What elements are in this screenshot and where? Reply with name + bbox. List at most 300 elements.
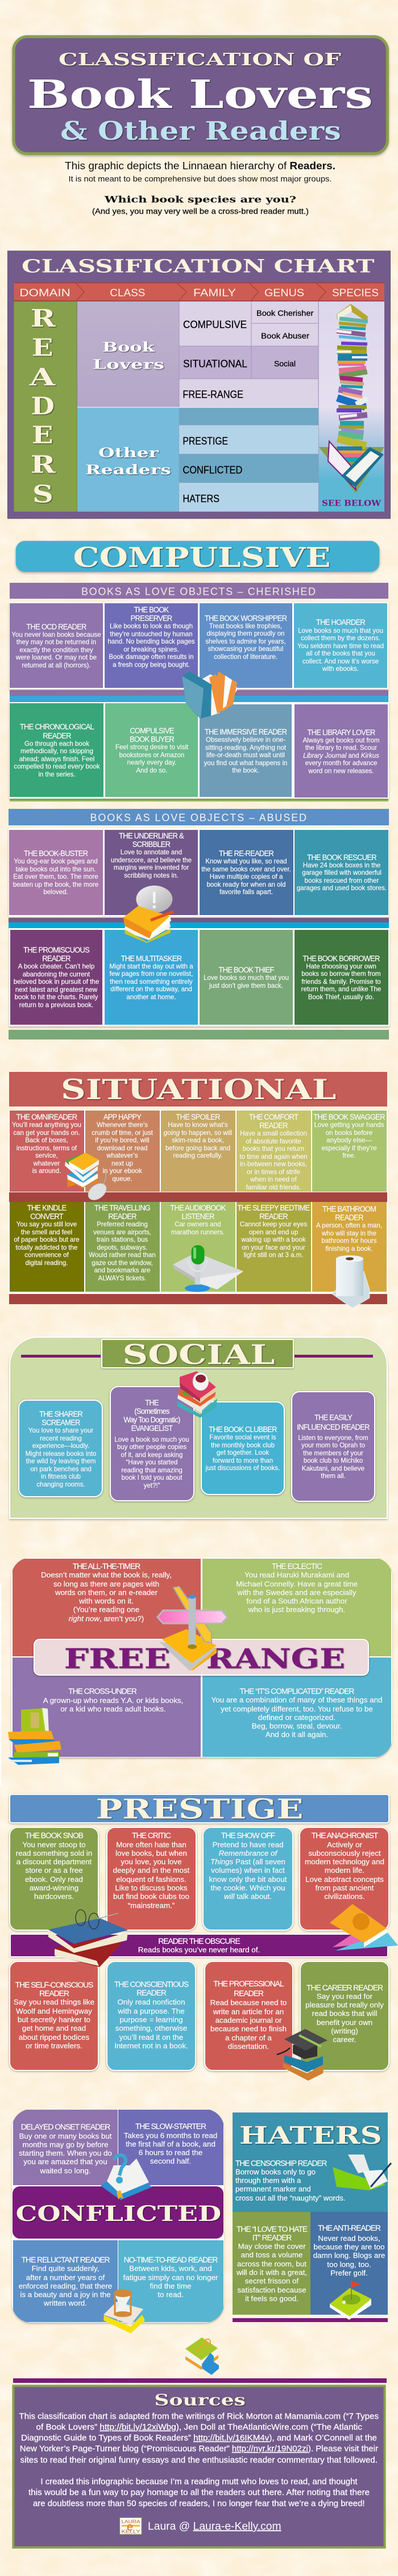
- icon: book stack and mouse: [65, 1153, 110, 1204]
- card: the book snob: award-winning: [30, 1884, 78, 1892]
- domain column: readers: S: [32, 480, 53, 508]
- card: the immersive reader: sitting-reading. Anything not: [205, 744, 286, 751]
- card: the book snob: You never stoop to: [22, 1840, 85, 1849]
- card: the book snob: read something sold in: [15, 1849, 92, 1857]
- card: the career reader: read books that will: [312, 2009, 377, 2018]
- card: the easily influenced reader: the members of your: [303, 1449, 363, 1457]
- card: the anachronist: subconsciously reject: [308, 1849, 380, 1857]
- frame row 2: [9, 702, 389, 799]
- family: haters: HATERS: [183, 492, 219, 504]
- card: the i love to hate it reader: across the room, but: [237, 2260, 306, 2268]
- card: the book-buster: Eat over them, too. The more: [14, 872, 98, 880]
- card: the multitasker: another at home.: [126, 993, 176, 1001]
- domain column: readers: [14, 302, 77, 512]
- quadrant: the it's complicated reader: [202, 1658, 391, 1757]
- card: the book snob: hardcovers.: [34, 1892, 74, 1901]
- card: the OCD reader: THE OCD READER: [27, 623, 86, 631]
- card: the show off: will talk about.: [224, 1892, 272, 1901]
- card: the hoarder: You seldom have time to read: [297, 642, 383, 650]
- card: the OCD reader: they may not be returned in: [16, 638, 97, 646]
- card: the sleepy bedtime reader: light still on at 3 a.m.: [244, 1251, 304, 1259]
- sub-banner abused: [9, 809, 389, 825]
- panel: header title: [14, 36, 388, 153]
- card: the OCD reader: returned at all (horrors).: [22, 661, 91, 669]
- header band with chevrons: GENUS: [264, 287, 304, 299]
- card: the book-buster: [9, 830, 103, 915]
- card: the re-reader: favorite falls apart.: [219, 888, 273, 896]
- card: the immersive reader: the book.: [232, 766, 259, 774]
- card: the comfort reader: or in times of strife: [247, 1168, 300, 1176]
- card: the book borrower: friends & family. Promise to: [302, 978, 381, 986]
- card: the chronological reader: Go through each book: [24, 740, 89, 748]
- card: the travelling reader: ALWAYS tickets.: [98, 1274, 147, 1282]
- panel: conflicted: [12, 2109, 224, 2323]
- card: the comfort reader: [237, 1110, 311, 1192]
- card: the book clubber: THE BOOK CLUBBER: [209, 1425, 277, 1434]
- bottom green band: [9, 799, 388, 801]
- panel: sources: [13, 2386, 385, 2548]
- quadrant: delayed onset reader: DELAYED ONSET READER: [20, 2123, 110, 2131]
- family: haters: [179, 483, 318, 512]
- card: the professional reader: Read because need to: [210, 1998, 287, 2007]
- panel: haters top: Borrow books only to go: [235, 2168, 316, 2176]
- quadrant: the eclectic: THE ECLECTIC: [272, 1562, 322, 1571]
- card: the anachronist: modern technology and: [305, 1857, 384, 1866]
- card: the book rescuer: Have 24 book boxes in the: [302, 861, 380, 869]
- card: the travelling reader: READER: [108, 1212, 136, 1221]
- card: the book clubber: just discussions of books.: [206, 1464, 280, 1472]
- card: the hoarder: collect. And now it’s worse: [302, 657, 379, 665]
- card: the book-buster: THE BOOK-BUSTER: [24, 849, 88, 858]
- card: the book swagger: THE BOOK SWAGGER: [314, 1113, 385, 1121]
- card: the library lover: [295, 704, 388, 798]
- logo: laura e kelly: e: [127, 2521, 133, 2533]
- card: the omnireader: THE OMNIREADER: [16, 1113, 77, 1121]
- card: the travelling reader: gaze out the window,: [92, 1259, 153, 1267]
- icon: glasses on books: [48, 1910, 128, 1967]
- family: conflicted: [179, 454, 318, 483]
- prestige heading: PRESTIGE: [96, 1794, 304, 1826]
- card: the spoiler: before going back and: [165, 1144, 230, 1152]
- card: app happy: next up: [111, 1159, 133, 1167]
- card: the sharer screamer: THE SHARER: [39, 1410, 82, 1418]
- card: the book rescuer: THE BOOK RESCUER: [307, 853, 376, 862]
- author credit: Laura @ Laura-e-Kelly.com: [148, 2520, 281, 2532]
- icon: blue and orange books: [182, 671, 237, 719]
- quadrant: the it's complicated reader: yet completely different, too. You refuse to be: [221, 1705, 372, 1713]
- haters bottom band: [232, 2318, 388, 2322]
- card: the kindle convert: [10, 1202, 84, 1292]
- icon: books with tea cup: [177, 1371, 217, 1418]
- card: the book snob: THE BOOK SNOB: [25, 1831, 83, 1840]
- card: the evangelist: Love a book so much you: [115, 1435, 189, 1443]
- intro text: [65, 160, 335, 216]
- card: the book worshipper: collection of literature.: [214, 653, 277, 661]
- card: the underliner and scribbler: margins were invented for: [114, 863, 189, 871]
- card: app happy: APP HAPPY: [103, 1113, 141, 1121]
- card: the OCD reader: were loaned. Or may not be: [16, 653, 97, 661]
- card: the book borrower: Book Thief, usually do.: [308, 993, 374, 1001]
- colour bands between abused rows: [9, 918, 389, 928]
- card: the i love to hate it reader: THE “I LOVE TO HATE: [236, 2225, 307, 2233]
- card: the hoarder: collect them by the dozens.: [301, 634, 380, 642]
- card: the library lover: THE LIBRARY LOVER: [308, 728, 375, 737]
- card: the self-conscious reader: but secretly hanker to: [18, 2015, 90, 2024]
- card: the sleepy bedtime reader: THE SLEEPY BEDTIME: [238, 1204, 310, 1212]
- card: the omnireader: can get your hands on.: [14, 1129, 80, 1137]
- icon: green book with pen: [333, 2155, 391, 2190]
- quadrant: the eclectic: [202, 1559, 391, 1656]
- card: the conscientious reader: something, otherwise: [115, 2024, 187, 2032]
- social heading: SOCIAL: [123, 1339, 275, 1371]
- card: the multitasker: few pages from one novelist,: [110, 970, 193, 978]
- card: the travelling reader: venues are airports,: [93, 1228, 151, 1236]
- card: the sharer screamer: changing rooms.: [36, 1480, 85, 1488]
- card: the library lover: every month for advance: [305, 759, 377, 767]
- card: the book clubber: get together. Look: [217, 1448, 269, 1456]
- card: the book worshipper: THE BOOK WORSHIPPER: [205, 614, 287, 623]
- card: the book-buster: You dog-ear book pages and: [14, 857, 98, 865]
- conflicted heading: CONFLICTED: [16, 2201, 221, 2226]
- card: the book swagger: especially if they’re: [322, 1144, 377, 1152]
- card: the evangelist: buy other people copies: [117, 1443, 186, 1451]
- card: the book borrower: [295, 930, 388, 1025]
- panel: haters top: [232, 2112, 388, 2212]
- quadrant: the all-the-timer: [13, 1559, 201, 1656]
- card: the book preserver: [105, 603, 198, 688]
- quadrant: the it's complicated reader: defined or categorized.: [258, 1713, 335, 1722]
- sources paragraph 1: Diagnostic Guide to Types of Book Readers” http://bit.ly/16IKM4v), and Mark O’Connell at the: [21, 2433, 377, 2443]
- header band with chevrons: DOMAIN: [19, 287, 71, 299]
- card: the book preserver: or breaking spines.: [124, 645, 179, 653]
- card: the re-reader: book ready for when an old: [207, 880, 286, 888]
- card: the omnireader: is around.: [32, 1167, 61, 1175]
- header band with chevrons: SPECIES: [332, 287, 379, 299]
- card: the underliner and scribbler: scribbling notes in.: [124, 871, 179, 879]
- card: the sleepy bedtime reader: READER: [260, 1212, 288, 1221]
- intro text: (And yes, you may very well be a cross-bred reader mutt.): [92, 207, 309, 216]
- quadrant: the eclectic: Michael Connelly. Have a great time: [236, 1580, 358, 1588]
- card: the anachronist: civilizations.: [324, 1892, 364, 1901]
- class: other readers: Readers: [85, 462, 171, 478]
- card: the sleepy bedtime reader: on your face and your: [242, 1243, 305, 1251]
- card: the travelling reader: depots, subways.: [97, 1243, 148, 1251]
- sources paragraph 1: New Yorker’s Page-Turner blog (“Promiscuous Reader” http://nyr.kr/19N02zi). Please visit their: [20, 2444, 378, 2454]
- quadrant: the all-the-timer: so long as there are pages with: [53, 1580, 159, 1588]
- card: the self-conscious reader: READER: [39, 1989, 69, 1998]
- card: the evangelist: [110, 1386, 194, 1501]
- card: the chronological reader: ahead; always finish. Feel: [19, 755, 94, 763]
- family grid lines: [179, 302, 318, 512]
- card: app happy: whatever’s: [107, 1151, 138, 1159]
- situational frame: [9, 1110, 388, 1294]
- card: the critic: More often hate than: [116, 1840, 186, 1849]
- card: the audiobook listener: marathon runners.: [171, 1228, 225, 1236]
- see below label: SEE BELOW: [322, 499, 381, 508]
- card: the anti-reader: [310, 2212, 388, 2315]
- card: the kindle convert: CONVERT: [31, 1212, 63, 1221]
- family: situational: SITUATIONAL: [183, 358, 247, 370]
- card: the career reader: career.: [333, 2035, 356, 2044]
- quadrant: the all-the-timer: (You’re reading one: [73, 1605, 139, 1614]
- card: the book swagger: free.: [343, 1151, 356, 1159]
- card: the omnireader: [10, 1110, 84, 1192]
- card: the critic: eloquent of fashions.: [116, 1875, 186, 1884]
- card: the omnireader: You’ll read anything you: [12, 1121, 81, 1129]
- card: the anti-reader: THE ANTI-READER: [318, 2224, 380, 2232]
- panel: haters top: THE CENSORSHIP READER: [235, 2159, 326, 2168]
- banner: reader the obscure: Reads books you’ve never heard of.: [138, 1945, 260, 1954]
- family: conflicted: CONFLICTED: [183, 464, 242, 475]
- card: the book preserver: THE BOOK: [134, 606, 169, 614]
- icon: hourglass on books: [103, 2289, 145, 2333]
- quadrant: the slow-starter: Takes you 6 months to read: [124, 2131, 217, 2140]
- family: prestige: [179, 425, 318, 454]
- quadrant: the all-the-timer: Doesn’t matter what the book is, really,: [41, 1571, 172, 1579]
- card: the travelling reader: THE TRAVELLING: [94, 1204, 150, 1212]
- quadrant: the reluctant reader: written word.: [44, 2299, 86, 2307]
- card: the book clubber: Favorite social event is: [209, 1433, 276, 1441]
- card: the self-conscious reader: [9, 1961, 99, 2071]
- quadrant: delayed onset reader: waited so long.: [40, 2166, 90, 2175]
- card: the bathroom reader: A person, often a man,: [316, 1221, 382, 1229]
- card: the book preserver: they’re untouched by human: [110, 630, 193, 638]
- card: the bathroom reader: finishing a book.: [326, 1245, 373, 1252]
- card: the chronological reader: THE CHRONOLOGICAL: [19, 723, 94, 731]
- card: the i love to hate it reader: secret frisson of: [244, 2277, 298, 2285]
- card: app happy: if you’re bored, will: [95, 1136, 150, 1144]
- card: the underliner and scribbler: SCRIBBLER: [132, 840, 170, 849]
- card: the book swagger: [312, 1110, 387, 1192]
- card: the multitasker: then read something entirely: [110, 978, 193, 986]
- card: the book thief: just don’t give them back.: [209, 982, 283, 990]
- free-range heading: [64, 1643, 345, 1675]
- genus: book abuser: Book Abuser: [261, 331, 309, 340]
- domain column: readers: R: [31, 450, 56, 478]
- card: the comfort reader: when in need of: [251, 1175, 297, 1183]
- card: the re-reader: THE RE-READER: [219, 849, 273, 858]
- card: the anti-reader: Never read books,: [318, 2234, 380, 2243]
- card: the book swagger: on books before: [326, 1129, 373, 1137]
- card: the omnireader: service,: [36, 1151, 58, 1159]
- chart title: CLASSIFICATION CHART: [22, 255, 375, 277]
- card: the sleepy bedtime reader: waking up with a book: [242, 1235, 306, 1243]
- card: the anachronist: from past ancient: [315, 1884, 374, 1892]
- domain column: readers: R: [31, 304, 56, 332]
- card: the book clubber: the monthly book club: [211, 1441, 275, 1449]
- quadrant: delayed onset reader: you are amazed that you: [23, 2157, 107, 2166]
- header band with chevrons: [14, 282, 384, 301]
- icon: toilet roll: [332, 1255, 370, 1308]
- card: the conscientious reader: Internet not in a book.: [114, 2041, 188, 2050]
- quadrant: the it's complicated reader: THE “IT’S COMPLICATED” READER: [239, 1687, 354, 1696]
- card: the anti-reader: because they are too: [314, 2243, 385, 2251]
- card: the travelling reader: Preferred reading: [97, 1220, 148, 1228]
- card: the evangelist: of it, and keep asking: [121, 1451, 183, 1459]
- card: the career reader: [300, 1961, 389, 2071]
- card: the kindle convert: totally addicted to the: [16, 1243, 78, 1251]
- title line: classification of: CLASSIFICATION OF: [59, 50, 341, 70]
- card: the bathroom reader: [312, 1202, 387, 1292]
- family: free-range: [179, 379, 318, 407]
- card: the critic: you love, you love: [121, 1857, 182, 1866]
- card: the self-conscious reader: Woolf and Hemingway: [16, 2007, 92, 2015]
- social divider right: [295, 1355, 373, 1358]
- card: the chronological reader: READER: [43, 732, 71, 740]
- card: the travelling reader: [85, 1202, 160, 1292]
- prestige banner: [9, 1794, 389, 1823]
- card: the evangelist: reading that amazing: [121, 1466, 183, 1473]
- card: the re-reader: Know what you like, so read: [206, 857, 287, 865]
- sources top band: [13, 2378, 387, 2383]
- card: the show off: [202, 1827, 293, 1931]
- card: the audiobook listener: [161, 1202, 235, 1292]
- card: the promiscuous reader: beloved book in pursuit of the: [14, 978, 99, 986]
- card: the career reader: (writing): [331, 2027, 358, 2035]
- card: the sleepy bedtime reader: open and end up: [249, 1228, 298, 1236]
- card: the book worshipper: [200, 603, 292, 688]
- icon: stack of colourful books: [8, 1708, 61, 1765]
- card: the i love to hate it reader: satisfaction because: [237, 2286, 306, 2294]
- card: the book worshipper: showcasing your beautiful: [208, 645, 284, 653]
- icon: globe book with set squares: [330, 1904, 398, 1951]
- card: the kindle convert: of paper books but are: [14, 1235, 80, 1243]
- card: the promiscuous reader: return to a previous book.: [19, 1001, 93, 1009]
- card: the audiobook listener: Car owners and: [175, 1220, 221, 1228]
- card: the immersive reader: you find out what happens in: [204, 759, 288, 767]
- free-range heading: RANGE: [206, 1643, 345, 1675]
- quadrant: delayed onset reader: starting them. When you do: [19, 2149, 111, 2157]
- card: the hoarder: [293, 603, 387, 688]
- card: the show off: know only the bit about: [209, 1875, 287, 1884]
- card: the easily influenced reader: your mom to Oprah to: [301, 1441, 365, 1449]
- haters heading: HATERS: [239, 2122, 382, 2149]
- quadrant: the slow-starter: second half.: [150, 2157, 191, 2165]
- card: the conscientious reader: READER: [136, 1989, 166, 1997]
- card: the immersive reader: THE IMMERSIVE READER: [205, 728, 287, 736]
- card: the book preserver: Like books to look as though: [110, 622, 193, 630]
- situational dark band 1: [9, 1192, 387, 1202]
- card: the chronological reader: compelled to read every book: [14, 762, 100, 770]
- domain column: readers: A: [29, 363, 56, 391]
- sources heading: Sources: [154, 2391, 246, 2409]
- card: the i love to hate it reader: and toss a volume: [241, 2251, 302, 2259]
- card: the book rescuer: [295, 830, 388, 915]
- card: the bathroom reader: who will stay in the: [322, 1229, 376, 1237]
- card: the promiscuous reader: book to hit the charts. Rarely: [15, 993, 98, 1001]
- quadrant: the reluctant reader: THE RELUCTANT READER: [21, 2256, 109, 2264]
- icon: tower of books: [319, 304, 384, 493]
- card: the book clubber: forward to more than: [213, 1456, 273, 1464]
- card: the career reader: THE CAREER READER: [306, 1984, 383, 1992]
- card: the professional reader: READER: [234, 1989, 263, 1998]
- card: the i love to hate it reader: IT” READER: [252, 2233, 291, 2242]
- card: the spoiler: skim-read a book,: [172, 1136, 224, 1144]
- icon: signpost on book: [157, 1586, 227, 1671]
- genus: book cherisher: Book Cherisher: [256, 308, 314, 318]
- card: the anachronist: modern life.: [325, 1866, 364, 1874]
- card: the professional reader: a chapter of a: [225, 2034, 272, 2042]
- card: the hoarder: THE HOARDER: [316, 618, 364, 627]
- card: the anti-reader: damn long. Blogs are: [313, 2251, 385, 2260]
- quadrant: the all-the-timer: THE ALL-THE-TIMER: [73, 1562, 140, 1571]
- card: the spoiler: reading carefully.: [173, 1151, 223, 1159]
- card: the professional reader: write an article for an: [213, 2007, 284, 2016]
- card: the bathroom reader: bathroom for hours: [322, 1237, 377, 1245]
- logo: laura e kelly: LAURA: [122, 2519, 140, 2524]
- species column: [319, 302, 384, 512]
- panel: classification chart: [7, 251, 391, 519]
- card: the career reader: benefit your own: [317, 2018, 372, 2027]
- class: book lovers: Lovers: [93, 357, 164, 372]
- card: the kindle convert: the smell and feel: [21, 1228, 73, 1236]
- heading: cherished: BOOKS AS LOVE OBJECTS – CHERISHED: [81, 586, 316, 597]
- icon: microphone on open book: [173, 1245, 243, 1292]
- sub-banner cherished: [9, 583, 388, 599]
- compulsive banner: [16, 541, 379, 574]
- icon: graduation cap on books: [277, 2029, 327, 2081]
- card: the book worshipper: Treat books like trophies,: [209, 622, 282, 630]
- card: the sharer screamer: experience—loudly.: [32, 1442, 89, 1450]
- quadrant: the eclectic: who is just breaking through.: [248, 1605, 345, 1614]
- card: the evangelist: EVANGELIST: [131, 1424, 173, 1433]
- card: the sharer screamer: on park benches and: [30, 1465, 91, 1473]
- free-range heading: FREE: [64, 1643, 171, 1675]
- quadrant: delayed onset reader: Buy one or many books but: [19, 2132, 111, 2140]
- sources paragraph 1: of Book Lovers” http://bit.ly/12xiWbg), Jen Doll at TheAtlanticWire.com (“The Atlantic: [36, 2423, 363, 2432]
- quadrant: no-time-to-read reader: fatigue simply can no longer: [123, 2273, 218, 2282]
- sources paragraph 2: are doubtless more than 50 species of readers, I no longer fear that we’re a dying breed!: [33, 2499, 365, 2508]
- sources paragraph 2: [28, 2477, 370, 2508]
- quadrant: the all-the-timer: words on them, or an e-reader: [55, 1588, 157, 1597]
- section: books as love objects abused: [9, 809, 389, 1039]
- quadrant: no-time-to-read reader: Between kids, work, and: [130, 2264, 212, 2273]
- quadrant: no-time-to-read reader: find the time: [150, 2282, 192, 2290]
- card: the promiscuous reader: [10, 930, 102, 1025]
- card: the anachronist: THE ANACHRONIST: [311, 1831, 378, 1840]
- card: the book thief: Love books so much that you: [204, 974, 289, 982]
- card: the book swagger: anybody else—: [327, 1136, 372, 1144]
- card: the book snob: a discount department: [16, 1857, 92, 1866]
- card: the chronological reader: in the series.: [38, 770, 75, 778]
- card: the show off: Pretend to have read: [212, 1840, 283, 1849]
- card: the comfort reader: to time and again when: [240, 1153, 308, 1160]
- card: the anti-reader: too long, too.: [327, 2260, 371, 2269]
- card: the underliner and scribbler: underscore, and believe the: [111, 856, 192, 864]
- card: the promiscuous reader: next latest and greatest new: [15, 986, 97, 993]
- card: the sharer screamer: SCREAMER: [42, 1418, 80, 1427]
- card: the comfort reader: READER: [260, 1121, 288, 1130]
- card: app happy: crumb of time, or just: [92, 1129, 153, 1137]
- card: the book thief: THE BOOK THIEF: [218, 966, 274, 974]
- domain column: readers: D: [31, 392, 55, 420]
- quadrant: the eclectic: with the Swedes and are especially: [237, 1588, 356, 1597]
- class: book lovers: [77, 302, 179, 407]
- card: the promiscuous reader: READER: [42, 954, 71, 963]
- card: the evangelist: yet?!”: [144, 1481, 160, 1489]
- card: the evangelist: (Sometimes: [135, 1407, 169, 1416]
- card: the book thief: [200, 930, 293, 1025]
- frame row 3: [8, 828, 389, 917]
- card: compulsive book buyer: [105, 703, 198, 797]
- divider class rows: [77, 407, 318, 408]
- logo: laura e kelly: [120, 2517, 142, 2535]
- card: the underliner and scribbler: [105, 830, 198, 915]
- card: the i love to hate it reader: it feels so good.: [245, 2294, 298, 2303]
- card: the career reader: pleasure but really only: [305, 2001, 384, 2009]
- card: the anachronist: Actively or: [327, 1840, 362, 1849]
- family: situational: [179, 346, 251, 379]
